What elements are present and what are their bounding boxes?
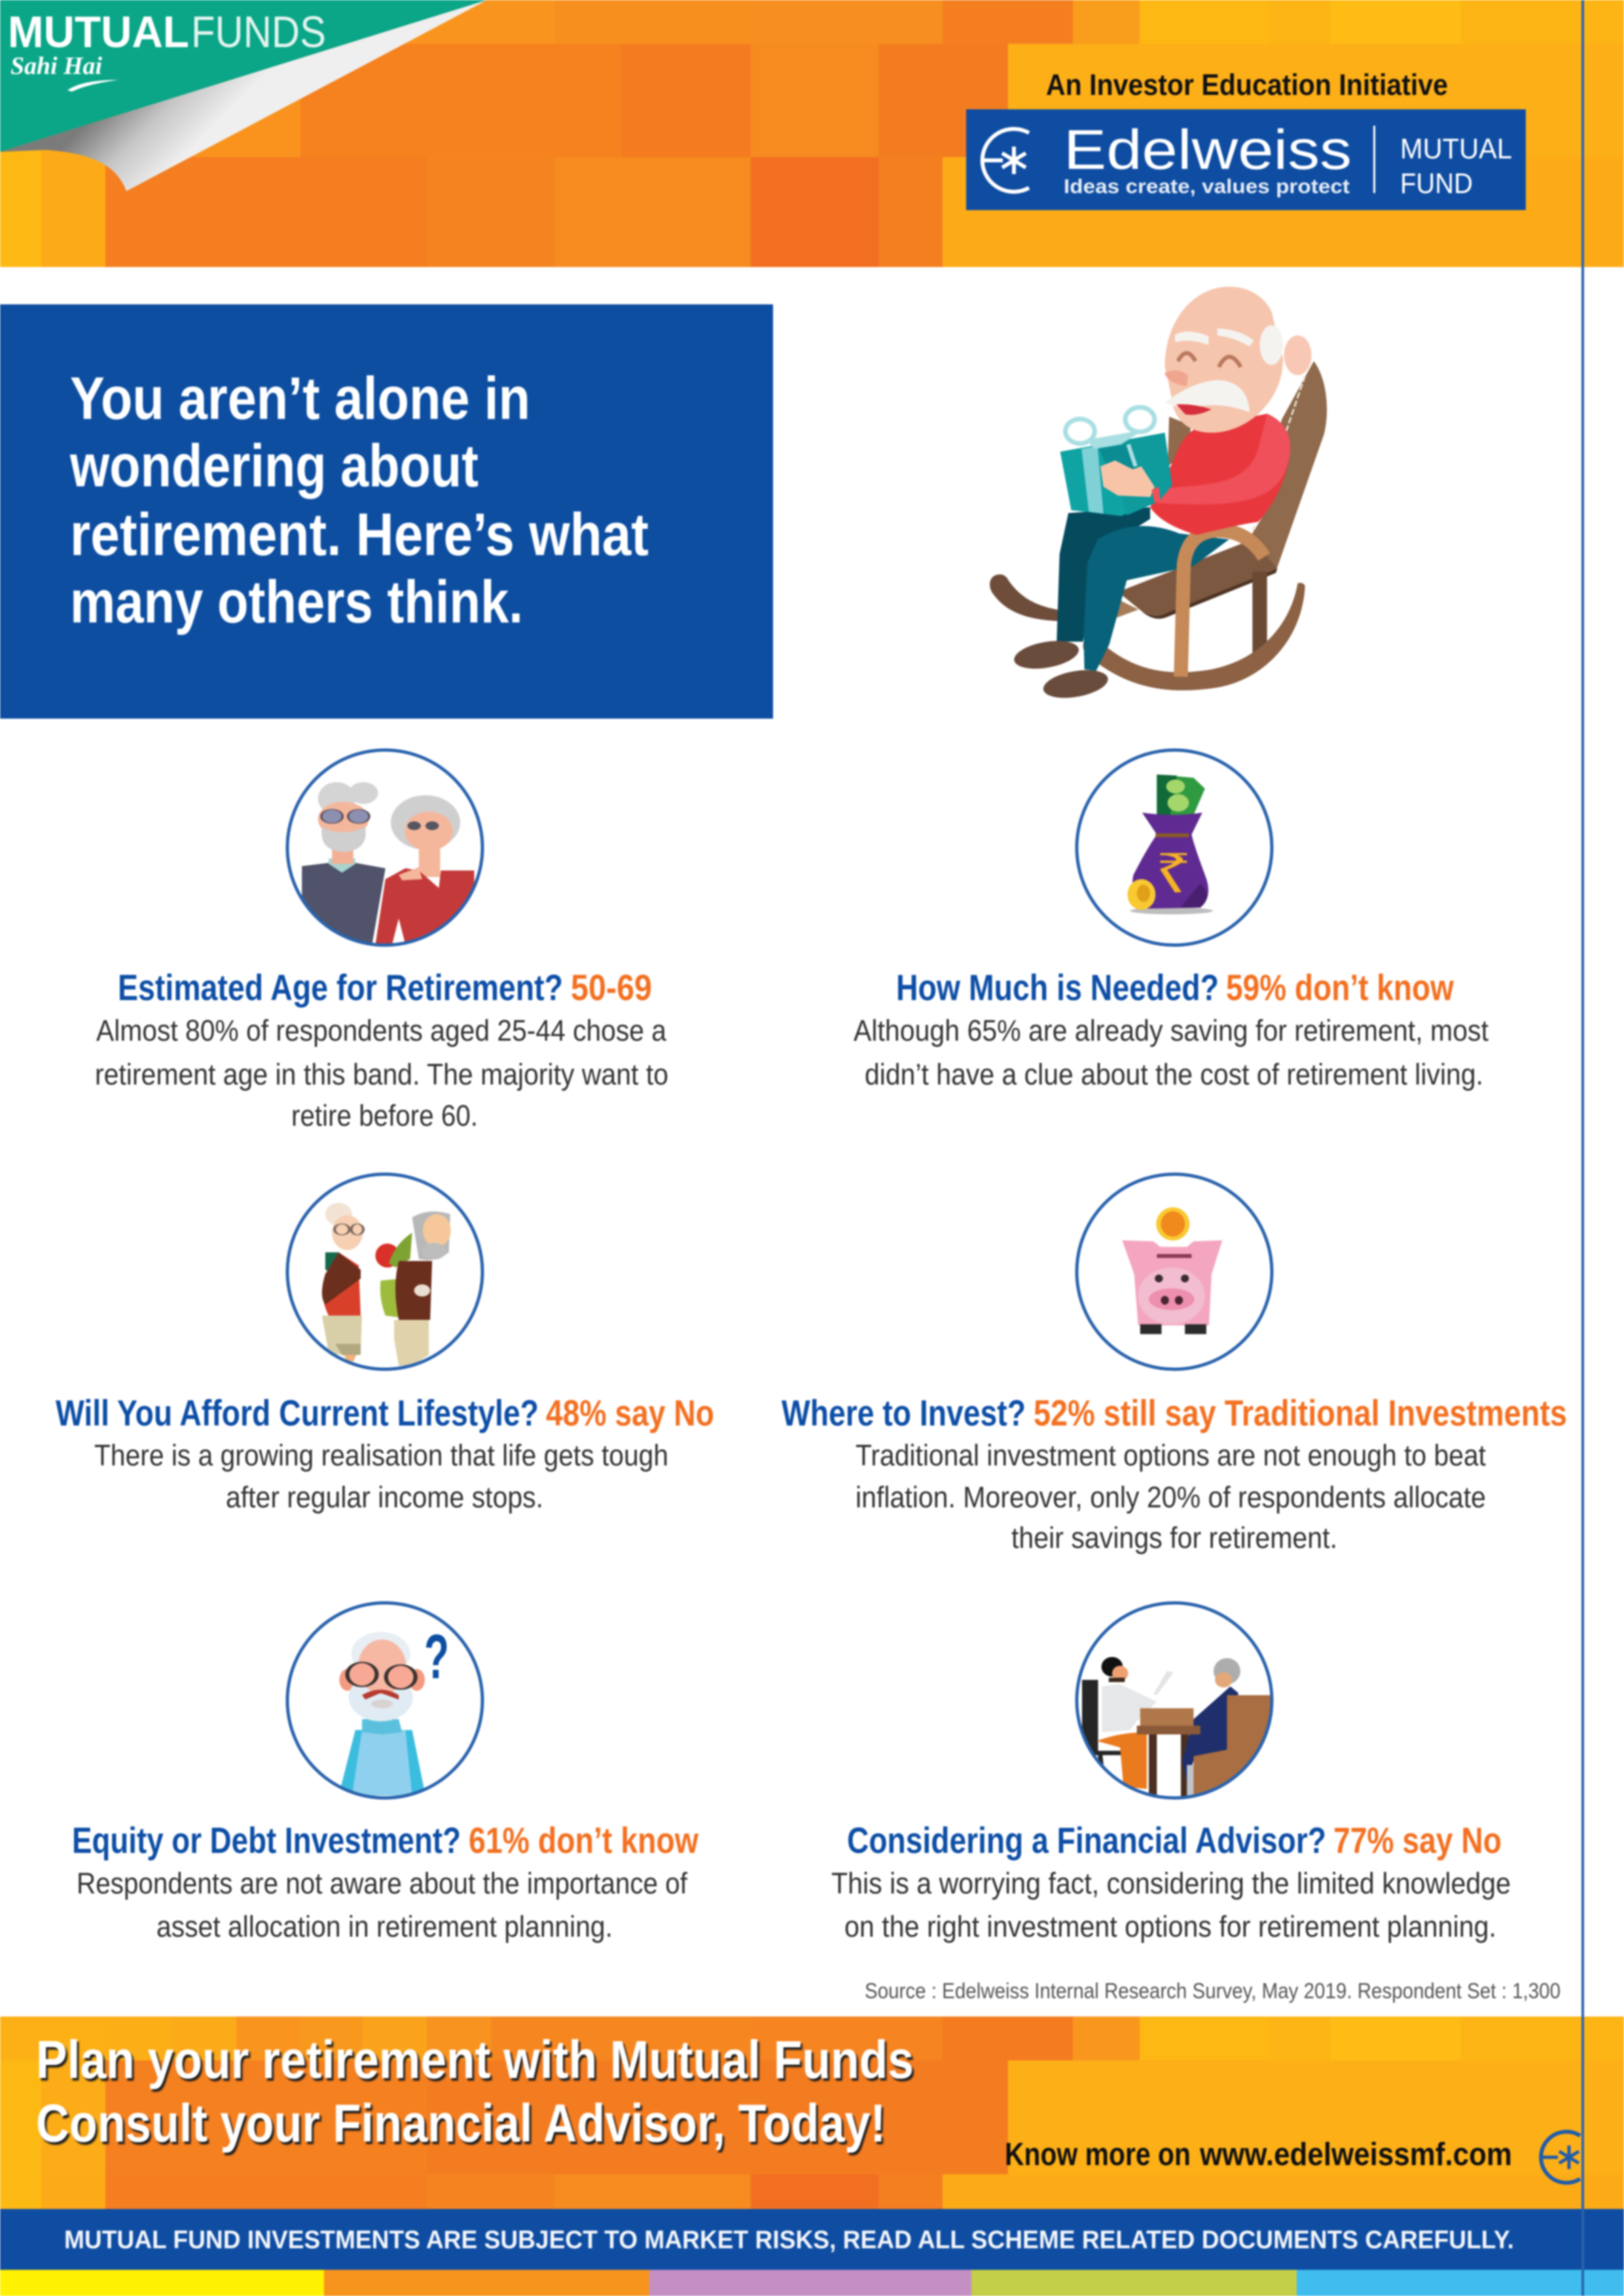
question mark: ? [424,1622,449,1692]
logo text [8,7,326,92]
shoes [1012,636,1081,673]
heading: 61% don’t know [469,1820,698,1861]
item: where to invest [782,1174,1567,1554]
icon: retired couple [287,750,482,945]
trousers [1056,507,1150,641]
arm rest [1181,531,1264,677]
head [1284,335,1312,375]
heading: Will You Afford Current Lifestyle? [56,1392,539,1433]
illustration: old man in rocking chair with gift [990,287,1327,702]
source note: Source : Edelweiss Internal Research Survey, May 2019. Respondent Set : 1,300 [865,1979,1561,2003]
heading: 48% say No [546,1392,714,1433]
header band [0,0,1624,267]
logo text: FUNDS [191,7,326,57]
item: afford current lifestyle [56,1174,714,1514]
heading: 50-69 [571,967,652,1008]
heading: How Much is Needed? [896,967,1219,1008]
description: their savings for retirement. [1011,1521,1337,1554]
description [831,1867,1511,1943]
description [94,1439,668,1514]
green folded corner [0,0,487,152]
icon: money bag [1077,750,1272,945]
Edelweiss emblem [982,129,1029,192]
description: asset allocation in retirement planning. [156,1910,613,1943]
item: how much is needed [854,750,1489,1091]
description: Although 65% are already saving for retirement, most [854,1014,1489,1047]
initiative tagline: An Investor Education Initiative [1046,68,1448,101]
icon: confused old man [287,1603,482,1798]
title text: wondering about [69,433,478,499]
heading: Where to Invest? [782,1392,1026,1433]
item: financial advisor [831,1603,1511,1943]
heading [896,967,1454,1008]
logo text: MUTUAL [8,7,189,57]
title text: You aren’t alone in [70,365,530,432]
Edelweiss Mutual Fund logo box: Edelweiss [1064,119,1352,181]
logo: Mutual Funds Sahi Hai green corner [0,0,487,191]
page curl [0,0,487,191]
description: This is a worrying fact, considering the limited knowledge [831,1867,1511,1900]
website link: www.edelweissmf.com [1199,2137,1512,2172]
description: didn’t have a clue about the cost of retirement living. [865,1058,1483,1091]
description [856,1439,1486,1554]
description [95,1014,668,1132]
description: Traditional investment options are not enough to beat [856,1439,1486,1472]
icon: elderly hikers [287,1174,482,1369]
description: Almost 80% of respondents aged 25-44 chose a [96,1014,667,1047]
Edelweiss Mutual Fund logo box: FUND [1400,168,1473,200]
description: Respondents are not aware about the importance of [77,1867,687,1900]
Edelweiss Mutual Fund logo box: MUTUAL [1400,133,1512,165]
icon: client meeting financial advisor [1077,1603,1272,1798]
heading [782,1392,1567,1433]
website link [1005,2137,1512,2172]
description: inflation. Moreover, only 20% of respondents allocate [856,1480,1486,1514]
heading: 59% don’t know [1226,967,1454,1008]
heading: Estimated Age for Retirement? [118,967,563,1008]
website link: Know more on [1005,2137,1191,2172]
small Edelweiss emblem [1540,2132,1580,2183]
Edelweiss Mutual Fund logo box: Ideas create, values protect [1064,175,1350,198]
item: equity or debt [72,1603,698,1943]
call to action text [36,2030,914,2153]
heading: Considering a Financial Advisor? [847,1820,1326,1861]
call to action text: Plan your retirement with Mutual Funds [36,2030,914,2090]
icon: piggy bank with coin [1077,1174,1272,1369]
title text: many others think. [70,569,523,636]
disclaimer bar: MUTUAL FUND INVESTMENTS ARE SUBJECT TO MARKET RISKS, READ ALL SCHEME RELATED DOCUMENTS CAREFULLY. [64,2226,1514,2254]
colour strip footer [0,2270,1624,2296]
chair [1238,361,1327,571]
heading: 77% say No [1333,1820,1502,1861]
Edelweiss Mutual Fund logo box [966,109,1526,210]
call to action text: Consult your Financial Advisor, Today! [36,2094,886,2153]
sweater [1150,414,1290,535]
title text: retirement. Here’s what [70,501,649,568]
description: on the right investment options for retirement planning. [844,1910,1496,1943]
hand [1100,461,1155,497]
description [77,1867,687,1943]
description [854,1014,1489,1091]
logo text: Sahi Hai [10,52,102,80]
description: after regular income stops. [226,1480,543,1514]
description: There is a growing realisation that life gets tough [94,1439,668,1472]
heading: Equity or Debt Investment? [72,1820,461,1861]
item: estimated retirement age [95,750,668,1132]
gift box [1060,407,1172,516]
title text [69,365,649,636]
description: retire before 60. [291,1099,478,1132]
description: retirement age in this band. The majority want to [95,1058,668,1091]
title panel [0,304,773,719]
disclaimer bar [0,2209,1624,2270]
bottom call-to-action band [0,2017,1624,2209]
